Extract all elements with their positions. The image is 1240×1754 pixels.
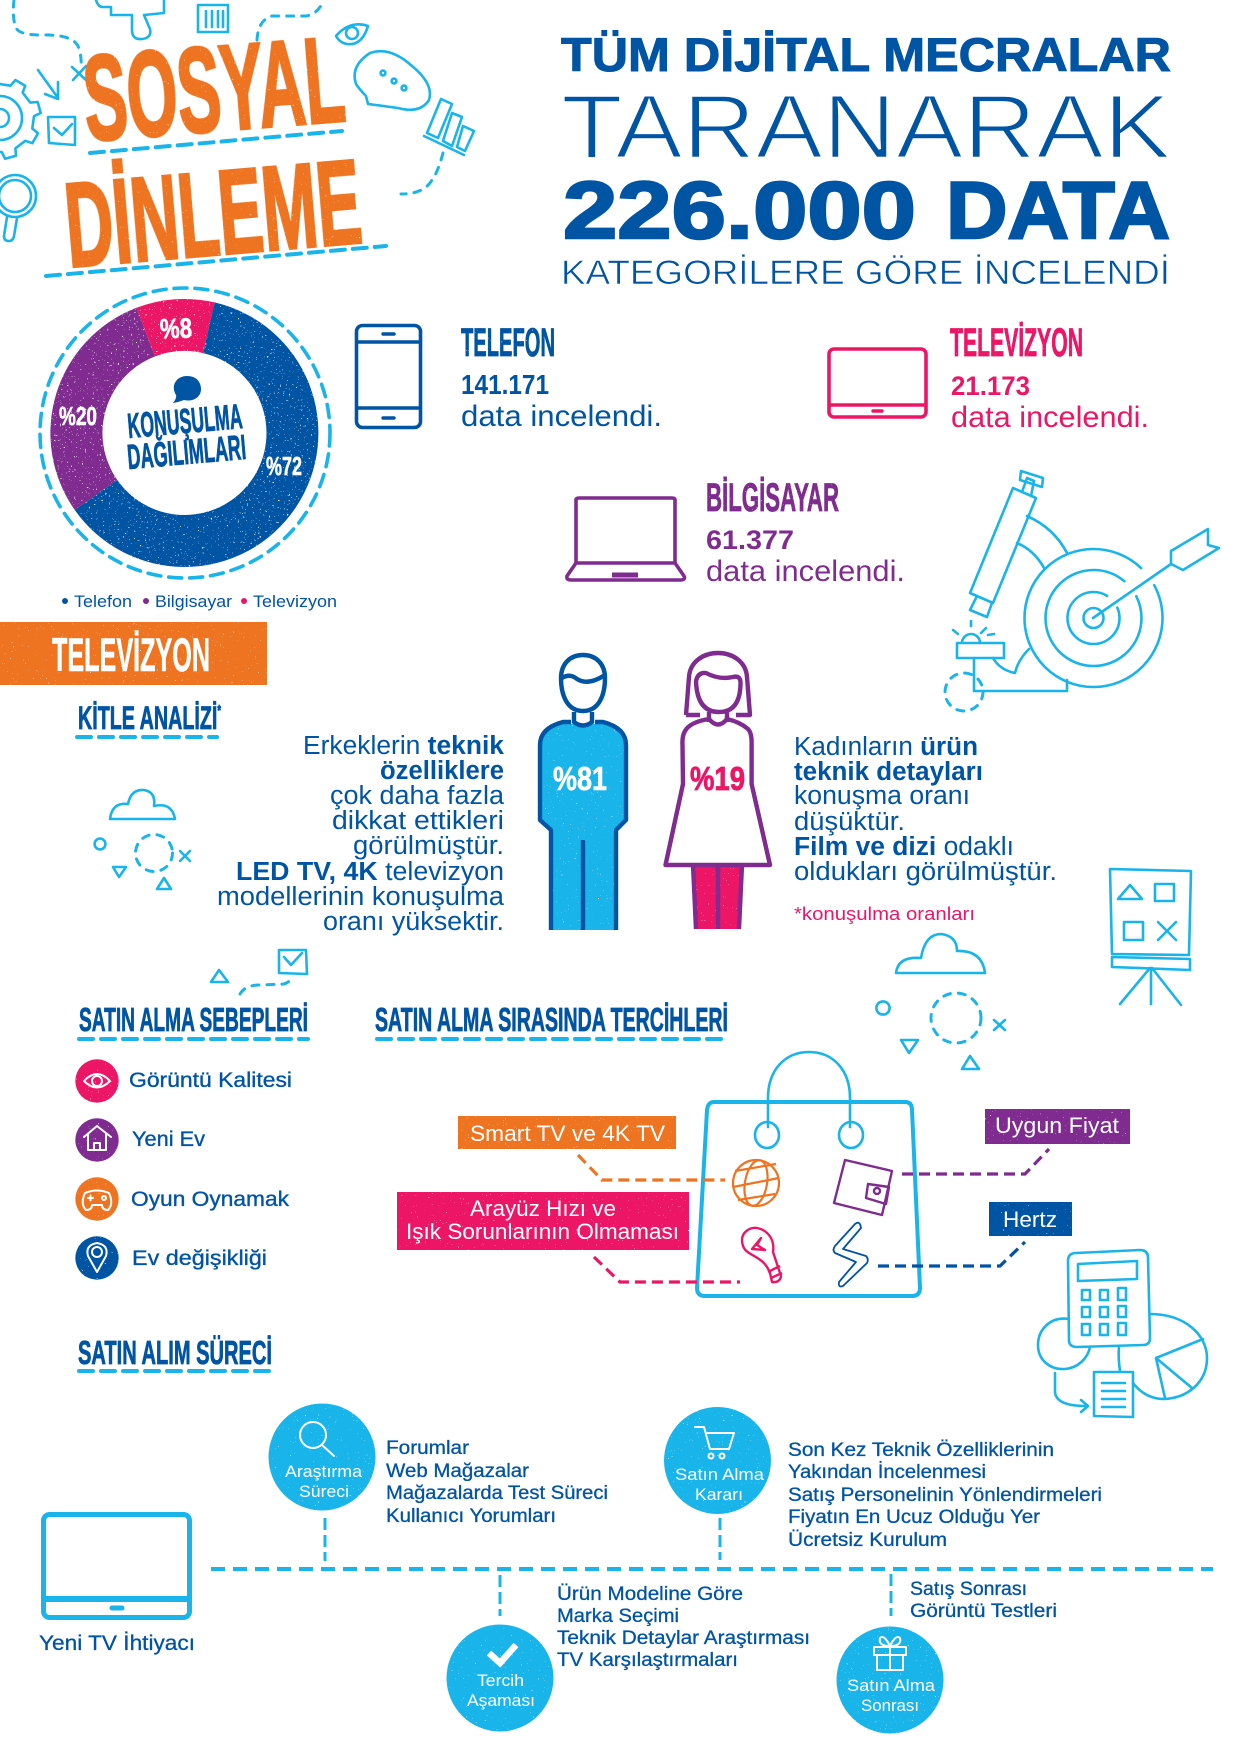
doodles right [876, 934, 1005, 1069]
detail list: Marka Seçimi [557, 1606, 679, 1627]
detail list [788, 1440, 1102, 1551]
icon: check [489, 1645, 516, 1663]
detail list [557, 1584, 810, 1671]
icon: puzzle piece [96, 0, 164, 39]
body text: men: oranı yüksektir. [323, 908, 504, 936]
headline line 4: KATEGORİLERE GÖRE İNCELENDİ [561, 253, 1170, 292]
dashed path top right [257, 0, 324, 40]
item: Yeni Ev [75, 1118, 206, 1162]
detail list: Web Mağazalar [386, 1461, 530, 1482]
icon: striped box [198, 5, 228, 32]
icon: speech bubble [355, 51, 430, 110]
step: satin alma karari [664, 1407, 1102, 1560]
body text: men: görülmüştür. [353, 832, 504, 860]
detail list: Son Kez Teknik Özelliklerinin [788, 1440, 1054, 1461]
item: Görüntü Kalitesi: Görüntü Kalitesi [129, 1069, 292, 1092]
value labels [59, 312, 302, 481]
item: Yeni Ev: Yeni Ev [132, 1128, 206, 1151]
step: tercih asamasi [446, 1575, 810, 1732]
icon: laptop [567, 498, 684, 580]
item: Görüntü Kalitesi [75, 1059, 292, 1103]
item: Oyun Oynamak: Oyun Oynamak [131, 1188, 290, 1211]
detail list: Mağazalarda Test Süreci [386, 1483, 608, 1504]
caption: data incelendi. [951, 401, 1149, 434]
bag rings [755, 1122, 863, 1148]
detail list: Satış Sonrası [910, 1579, 1027, 1600]
body text: women: teknik detayları [794, 758, 983, 786]
section banner: televizyon: TELEVİZYON [52, 628, 210, 681]
figure: man: %81 [553, 760, 607, 797]
headline block [561, 28, 1171, 292]
legend [62, 593, 337, 611]
icon: chat bubble [173, 376, 201, 403]
heading: BİLGİSAYAR [706, 476, 839, 520]
stat: bilgisayar [567, 476, 905, 588]
figure: man [540, 655, 626, 930]
center label: DAĞILIMLARI [126, 427, 248, 477]
body text: women: Kadınların ürün [794, 733, 978, 761]
step: satin alma sonrasi: Satın Alma [847, 1676, 936, 1695]
icon: tv [44, 1514, 190, 1618]
body text: men: Erkeklerin teknik [303, 732, 505, 760]
heading: kitle analizi: KİTLE ANALİZİ [78, 700, 304, 736]
legend: Televizyon [253, 593, 337, 611]
dashed underline 2 [46, 246, 386, 276]
step: arastirma sureci: Araştırma [285, 1462, 363, 1481]
icon: lightning [834, 1223, 868, 1286]
shopping bag diagram [697, 1052, 920, 1296]
headline line 1: TÜM DİJİTAL MECRALAR [561, 28, 1171, 81]
body text: women: konuşma oranı [794, 782, 970, 810]
step: satin alma sonrasi: Sonrası [861, 1696, 919, 1715]
step: satin alma sonrasi [836, 1574, 1057, 1734]
headline line 3 [563, 166, 1170, 256]
legend: Bilgisayar [155, 593, 233, 611]
caption: data incelendi. [461, 400, 662, 433]
callout: arayuz hizi [397, 1192, 740, 1282]
detail list: Ücretsiz Kurulum [788, 1530, 947, 1551]
callout: arayuz hizi: Arayüz Hızı ve [470, 1196, 616, 1221]
heading: TELEFON [461, 321, 555, 365]
callout: uygun fiyat [902, 1109, 1130, 1174]
stat: televizyon [829, 321, 1149, 434]
list: purchase reasons [75, 1059, 292, 1280]
body text: men: çok daha fazla [330, 782, 505, 810]
icon: globe [733, 1158, 779, 1208]
doodles above purchase reasons [211, 950, 307, 994]
callout: uygun fiyat: Uygun Fiyat [995, 1113, 1119, 1138]
detail list: Kullanıcı Yorumları [386, 1506, 556, 1527]
detail list: Forumlar [386, 1438, 470, 1459]
donut chart: conversation distribution [40, 288, 330, 578]
caption: data incelendi. [706, 555, 905, 588]
icon: cross [72, 66, 86, 80]
detail list: Ürün Modeline Göre [557, 1584, 743, 1605]
step: tercih asamasi: Tercih [477, 1671, 524, 1690]
headline line 3: DATA [946, 166, 1170, 256]
heading: kitle analizi [77, 700, 221, 737]
icon: microscope and target [945, 471, 1219, 711]
icon: wallet [834, 1160, 892, 1215]
icon: calculator, charts and document [1038, 1250, 1207, 1417]
callout: smart tv ve 4k tv [458, 1116, 725, 1180]
detail list: Teknik Detaylar Araştırması [557, 1628, 810, 1649]
icon: magnifier [0, 175, 36, 241]
step: tercih asamasi: Aşaması [467, 1691, 535, 1710]
callout: hertz: Hertz [1003, 1207, 1057, 1232]
step: arastirma sureci [268, 1404, 608, 1561]
dashed path right of title [401, 153, 443, 194]
figure: woman [666, 653, 770, 929]
value labels: %72 [266, 451, 302, 481]
item: Ev değişikliği [75, 1236, 267, 1280]
body text: women: düşüktür. [794, 808, 905, 836]
icon: phone [356, 326, 420, 428]
body text: women: oldukları görülmüştür. [794, 858, 1057, 886]
icon: light bulb [742, 1228, 782, 1282]
value labels: %8 [159, 312, 192, 345]
heading: satin alma sebepleri: SATIN ALMA SEBEPLERİ [79, 1002, 308, 1039]
icon: eye [336, 24, 368, 44]
callout: arayuz hizi: Işık Sorunlarının Olmaması [406, 1219, 679, 1244]
legend: Telefon [74, 593, 132, 611]
count: 141.171 [461, 369, 549, 400]
icon: check box [48, 117, 75, 145]
dashed outer ring [40, 288, 330, 578]
item: Ev değişikliği: Ev değişikliği [132, 1247, 267, 1270]
icon: presentation board [1110, 869, 1191, 1005]
icon: arrow [38, 70, 58, 99]
icon: bar chart [424, 99, 474, 155]
body text: men: dikkat ettikleri [332, 807, 504, 835]
label: Yeni TV İhtiyacı [39, 1632, 195, 1655]
footnote: *konuşulma oranları [794, 904, 975, 924]
body text: men: özelliklere [380, 757, 504, 785]
icon: magnifier [300, 1422, 334, 1456]
icon: tv [829, 349, 926, 417]
count: 61.377 [706, 525, 794, 555]
doodles around the title [0, 0, 474, 241]
body text: men: modellerinin konuşulma [217, 883, 505, 911]
icon: gear [0, 80, 41, 159]
detail list: TV Karşılaştırmaları [557, 1650, 738, 1671]
figure: woman: %19 [690, 760, 745, 797]
count: 21.173 [951, 371, 1030, 401]
step: satin alma karari: Kararı [695, 1485, 743, 1504]
step: satin alma karari: Satın Alma [675, 1465, 765, 1484]
headline line 2: TARANARAK [561, 77, 1171, 178]
heading: kitle analizi: * [217, 702, 221, 719]
donut segments [50, 299, 318, 567]
callout: smart tv ve 4k tv: Smart TV ve 4K TV [470, 1121, 665, 1146]
start: yeni tv ihtiyaci [39, 1514, 195, 1655]
value labels: %20 [59, 401, 97, 431]
item: Oyun Oynamak [75, 1177, 290, 1221]
detail list: Görüntü Testleri [910, 1601, 1057, 1622]
step: arastirma sureci: Süreci [299, 1482, 349, 1501]
dashed underline 1 [90, 131, 342, 153]
center label: KONUŞULMA [126, 397, 244, 446]
stat: telefon [356, 321, 662, 433]
detail list [910, 1579, 1057, 1622]
dashed path top left [13, 0, 81, 68]
bag handle [768, 1052, 850, 1127]
process timeline axis [211, 1567, 1213, 1571]
body text: men [217, 732, 505, 936]
center label [123, 397, 248, 477]
body text: women: Film ve dizi odaklı [794, 833, 1014, 861]
detail list: Yakından İncelenmesi [788, 1462, 986, 1483]
doodles left [95, 790, 190, 889]
title word: Dinleme: DİNLEME [60, 135, 366, 293]
icon: cart [695, 1427, 734, 1458]
heading: TELEVİZYON [950, 321, 1083, 365]
body text: men: LED TV, 4K televizyon [236, 858, 504, 886]
detail list: Satış Personelinin Yönlendirmeleri [788, 1485, 1102, 1506]
body text: women [794, 733, 1057, 924]
headline line 3: 226.000 [563, 166, 916, 256]
title: Sosyal Dinleme [46, 11, 386, 293]
icon: gift [874, 1637, 906, 1670]
bag outline [697, 1102, 920, 1296]
detail list [386, 1438, 608, 1527]
heading: satin alim sureci: SATIN ALIM SÜRECİ [78, 1335, 272, 1372]
callout: hertz [878, 1202, 1072, 1266]
detail list: Fiyatın En Ucuz Olduğu Yer [788, 1507, 1041, 1528]
heading: satin alma sirasinda tercihleri: SATIN ALMA SIRASINDA TERCİHLERİ [375, 1002, 728, 1039]
section banner: televizyon [0, 622, 267, 685]
